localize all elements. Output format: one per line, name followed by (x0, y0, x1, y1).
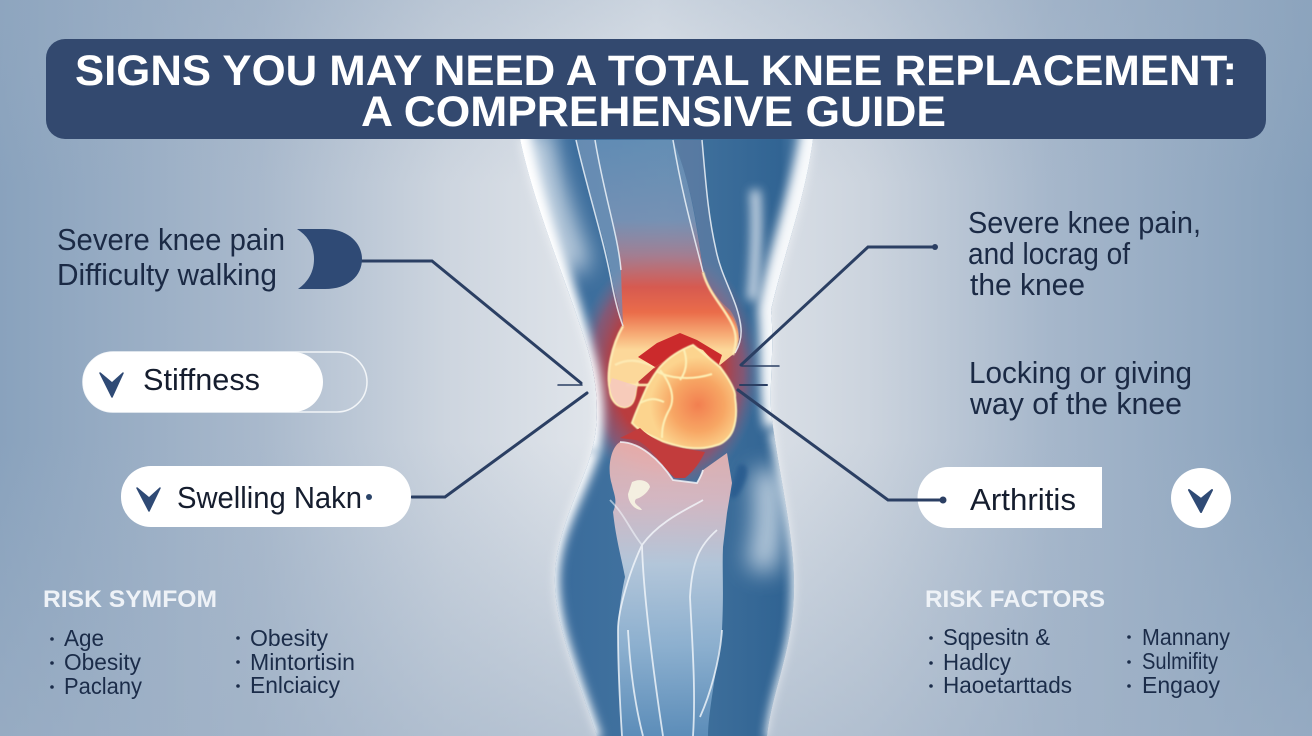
left list: risk symfom: RISK SYMFOM (43, 586, 217, 613)
right text: severe knee pain: the knee (970, 267, 1085, 302)
icon: chevron circle (1171, 468, 1231, 528)
right text: locking: way of the knee (969, 386, 1182, 421)
right list: risk factors: Engaoy (1142, 672, 1220, 698)
femur right band (673, 140, 742, 353)
right text: locking (969, 355, 1192, 421)
femur left band (576, 140, 623, 326)
right text: severe knee pain: Severe knee pain, (968, 205, 1201, 240)
left callout: severe knee pain: Severe knee pain (57, 222, 285, 257)
calf highlight (760, 470, 769, 570)
right pill: arthritis (888, 467, 1102, 528)
right list: risk factors: Sulmifity (1142, 648, 1218, 674)
right list: risk factors: RISK FACTORS (925, 586, 1105, 613)
dark fold under joint (730, 464, 747, 498)
knee anatomy illustration (520, 139, 814, 736)
left callout: severe knee pain: Difficulty walking (57, 257, 277, 292)
thigh highlight (752, 190, 756, 300)
left list: risk symfom: Paclany (64, 673, 142, 699)
right list: risk factors: Mannany (1142, 624, 1230, 650)
joint gap (638, 333, 722, 367)
inner white rim right (775, 130, 818, 425)
right text: severe knee pain: and locrag of (968, 236, 1130, 271)
shin bones (610, 442, 732, 736)
right pill: arthritis: Arthritis (970, 482, 1076, 517)
icon: crescent marker (297, 229, 362, 289)
leg outer glow (520, 139, 813, 736)
right list: risk factors (925, 586, 1230, 698)
left pill: stiffness (83, 352, 367, 412)
icon: chevron (137, 488, 160, 511)
left list: risk symfom (43, 586, 355, 699)
bone fragment (628, 480, 650, 510)
inner white rim left (513, 130, 586, 450)
title banner (46, 39, 1266, 139)
left pill: swelling: Swelling Nakn (177, 480, 362, 515)
left callout: severe knee pain (57, 222, 362, 292)
left condyle pale lobe (610, 378, 637, 407)
shin contour lines (610, 442, 722, 736)
patella contour lines (632, 345, 736, 448)
leg body (520, 139, 813, 736)
left pill: swelling (121, 466, 411, 527)
heat glow (586, 265, 756, 482)
soft white veil left (535, 130, 578, 270)
thigh bone (595, 140, 739, 407)
right list: risk factors: Haoetarttads (943, 672, 1072, 698)
left pill: stiffness: Stiffness (143, 362, 260, 397)
patella (632, 345, 736, 448)
femur condyle outline (609, 272, 736, 407)
right text: locking: Locking or giving (969, 355, 1192, 390)
icon: chevron (100, 373, 123, 397)
left list: risk symfom: Enlciaicy (250, 672, 340, 698)
left list: risk symfom: Obesity (64, 649, 141, 675)
connector lines (362, 247, 943, 500)
femur contour lines (576, 140, 741, 353)
title banner: A COMPREHENSIVE GUIDE (361, 88, 946, 136)
under-joint red space (620, 428, 705, 478)
left list: risk symfom: Age (64, 625, 104, 651)
left list: risk symfom: Obesity (250, 625, 328, 651)
lower rim (551, 450, 594, 736)
title banner: SIGNS YOU MAY NEED A TOTAL KNEE REPLACEMENT: (75, 47, 1237, 95)
left list: risk symfom: Mintortisin (250, 649, 355, 675)
right list: risk factors: Hadlcy (943, 649, 1011, 675)
right text: severe knee pain (932, 205, 1201, 302)
right list: risk factors: Sqpesitn & (943, 624, 1050, 650)
